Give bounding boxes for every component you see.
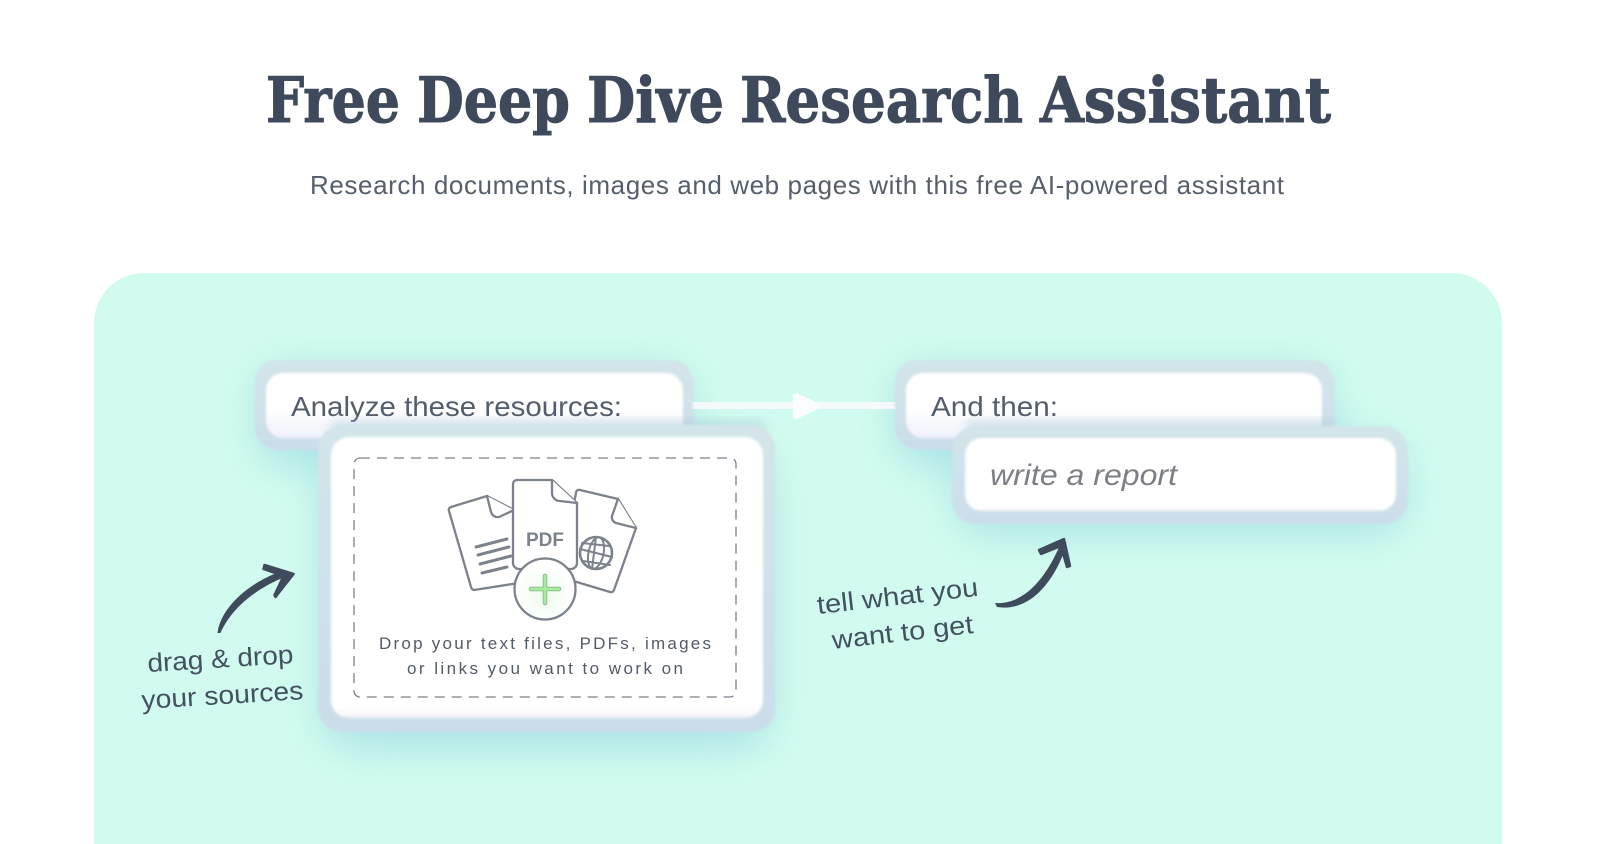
annotation: tell what you want: want to get	[829, 609, 976, 655]
card: analyze these resources	[255, 360, 693, 450]
subtitle: Research documents, images and web pages with this free AI-powered assistant	[310, 170, 1285, 200]
drop zone caption: Drop your text files, PDFs, images	[379, 634, 711, 653]
icon: plus circle	[514, 558, 576, 620]
card: write a report	[952, 426, 1408, 524]
title: Deep	[417, 63, 570, 137]
icon: pdf document	[513, 480, 577, 569]
title: Assistant	[1039, 63, 1331, 137]
annotation: drag and drop: drag & drop	[147, 639, 294, 678]
shadow over top cards	[330, 420, 1335, 432]
title: Free	[266, 63, 400, 137]
drop zone caption: or links you want to work on	[407, 659, 683, 678]
card: drop zone	[318, 425, 775, 732]
panel: mint background	[94, 273, 1502, 844]
connector arrow	[690, 396, 896, 416]
arrow: drag and drop	[218, 565, 294, 633]
drop zone caption	[379, 634, 711, 678]
card shadows	[262, 372, 1400, 745]
input text: write a report	[990, 459, 1179, 492]
annotation: tell what you want	[815, 572, 980, 655]
annotation: drag and drop	[141, 639, 304, 715]
icon: web document	[560, 490, 636, 592]
title: Dive	[587, 63, 724, 137]
card: and then	[895, 360, 1334, 450]
annotation: tell what you want: tell what you	[815, 572, 980, 620]
icon: text document	[449, 496, 538, 590]
icon: documents with plus	[449, 480, 636, 620]
title: Research	[740, 63, 1023, 137]
arrow: tell what you want	[995, 539, 1070, 608]
card label: analyze: Analyze these resources:	[291, 391, 622, 422]
card label: and then: And then:	[931, 391, 1058, 422]
title	[266, 63, 1331, 137]
pdf label: PDF	[526, 530, 564, 551]
annotation: drag and drop: your sources	[141, 675, 304, 715]
dashed drop area	[354, 458, 736, 697]
